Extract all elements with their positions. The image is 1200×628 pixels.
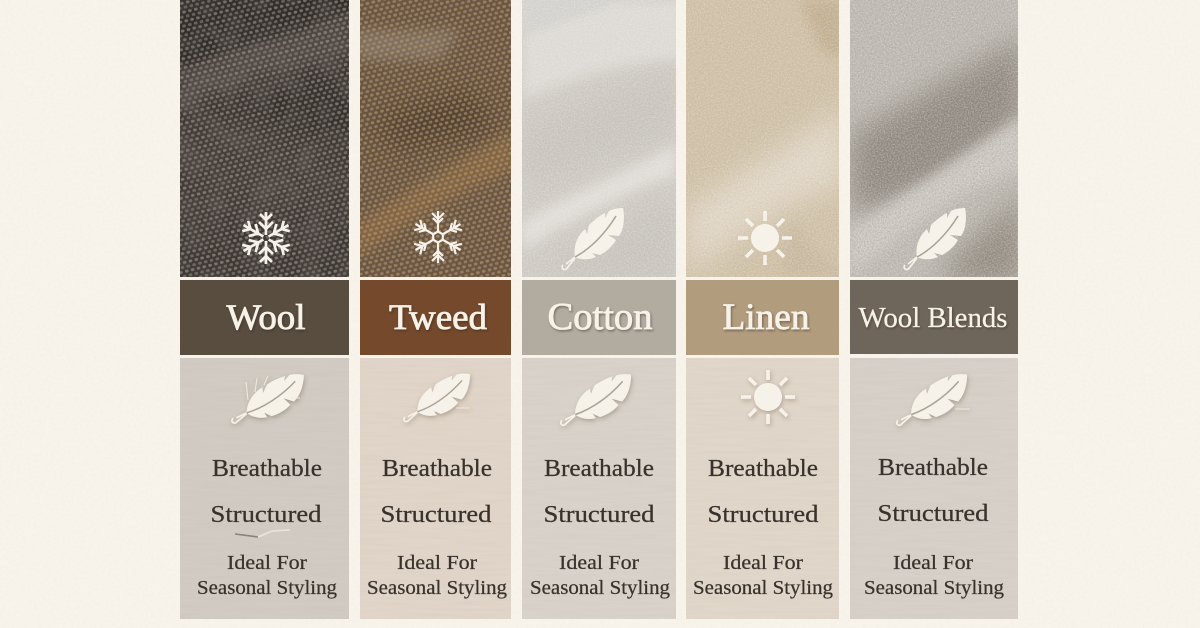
property text	[367, 456, 507, 599]
property text	[530, 456, 670, 599]
properties panel: Wool	[180, 358, 349, 619]
property text: Seasonal Styling	[530, 577, 670, 599]
icon: feather	[904, 208, 966, 270]
fabric swatch: wool	[180, 0, 350, 277]
icon: feather	[231, 362, 305, 435]
fabric swatch: linen	[686, 0, 845, 277]
icon: snowflake	[240, 212, 292, 264]
name band: Wool	[180, 280, 349, 355]
property text: Breathable	[708, 456, 818, 482]
name band: Cotton: Cotton	[548, 296, 652, 338]
property text: Breathable	[544, 456, 654, 482]
icon: feather	[560, 364, 632, 435]
property text: Seasonal Styling	[864, 577, 1004, 599]
property text	[864, 455, 1004, 599]
name band: Wool: Wool	[226, 297, 306, 337]
column: Wool Blends	[850, 0, 1025, 619]
properties panel: Tweed	[360, 358, 511, 619]
name band: Linen	[686, 280, 839, 355]
property text: Structured	[544, 502, 654, 528]
property text: Breathable	[212, 456, 322, 482]
name band: Cotton	[522, 280, 676, 355]
icon: snowflake	[412, 211, 464, 263]
property text: Structured	[708, 502, 818, 528]
property text: Seasonal Styling	[693, 577, 833, 599]
name band: Linen: Linen	[722, 297, 810, 338]
property text: Ideal For	[723, 552, 803, 574]
fabric swatch: wool blends	[850, 0, 1025, 285]
fabric swatch: tweed	[355, 0, 515, 277]
icon: sun	[738, 211, 792, 265]
properties panel: Cotton	[522, 358, 676, 619]
property text: Structured	[210, 502, 322, 528]
property text: Breathable	[878, 455, 988, 481]
icon: sun	[741, 370, 795, 424]
property text: Seasonal Styling	[197, 577, 337, 599]
property text: Structured	[878, 501, 988, 527]
property text	[197, 456, 337, 599]
property text: Ideal For	[227, 552, 307, 574]
property text: Structured	[380, 502, 492, 528]
icon: feather	[403, 364, 471, 431]
column: Cotton	[522, 0, 690, 619]
property text: Breathable	[382, 456, 492, 482]
column: Tweed	[355, 0, 515, 619]
name band: Tweed: Tweed	[389, 297, 487, 337]
property text: Ideal For	[893, 552, 973, 574]
property text: Ideal For	[559, 552, 639, 574]
name band: Tweed	[360, 280, 511, 355]
property text: Seasonal Styling	[367, 577, 507, 599]
fabric swatch: cotton	[522, 0, 676, 277]
properties panel: Linen	[686, 358, 839, 619]
property text	[693, 456, 833, 599]
column: Linen	[686, 0, 845, 619]
name band: Wool Blends: Wool Blends	[858, 303, 1008, 334]
column: Wool	[180, 0, 350, 619]
properties panel: Wool Blends	[850, 358, 1018, 619]
name band: Wool Blends	[850, 280, 1018, 354]
property text: Ideal For	[397, 552, 477, 574]
icon: feather	[562, 208, 624, 270]
icon: feather	[896, 364, 970, 435]
